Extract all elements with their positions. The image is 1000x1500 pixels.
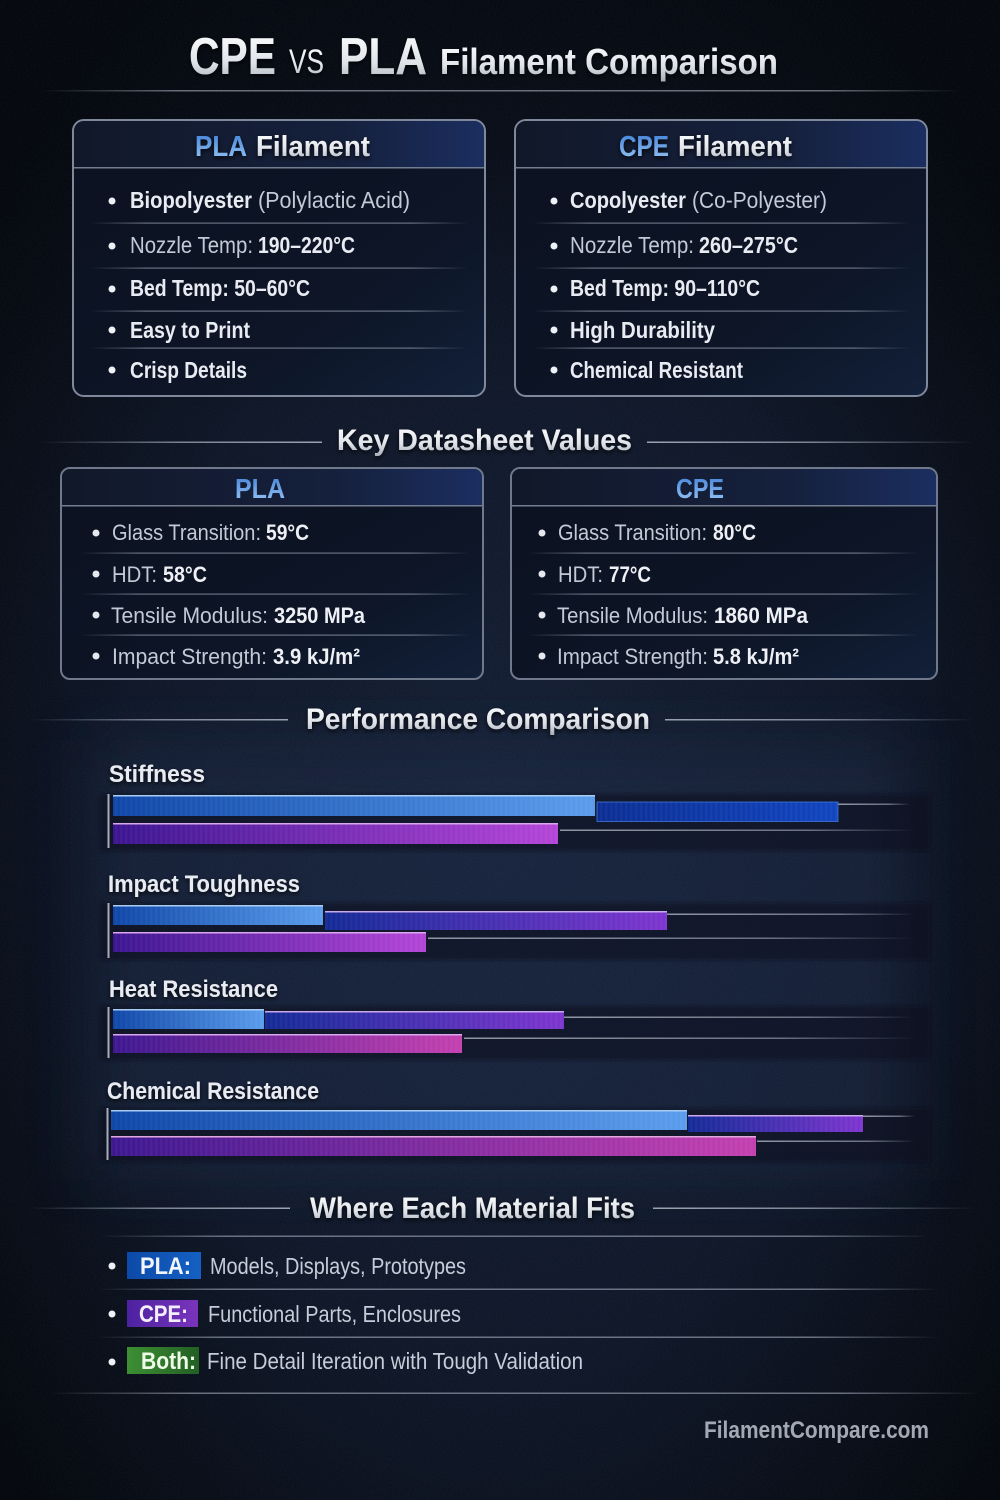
list: PLA properties: (Polylactic Acid) <box>258 187 410 213</box>
list: CPE properties <box>550 187 827 383</box>
tag: Both: Both: <box>141 1348 196 1375</box>
panel: CPE filament <box>515 120 927 396</box>
list: Both use <box>108 1347 583 1375</box>
list: CPE datasheet values: 80°C <box>713 520 756 545</box>
title <box>189 28 778 86</box>
heading: CPE Filament <box>619 131 792 163</box>
bar group: Chemical Resistance <box>106 1078 915 1160</box>
footer: site name: FilamentCompare.com <box>704 1417 929 1444</box>
list: PLA datasheet values: 58°C <box>163 562 207 587</box>
list: PLA properties: Crisp Details <box>130 357 247 383</box>
list: PLA use <box>108 1252 466 1280</box>
panel: PLA datasheet <box>61 468 483 679</box>
list: CPE properties: Nozzle Temp: <box>570 232 694 258</box>
list: CPE datasheet values: HDT: <box>558 562 603 587</box>
bar group: Heat Resistance: Heat Resistance <box>109 976 278 1003</box>
bar group: Chemical Resistance: Chemical Resistance <box>107 1078 319 1105</box>
bar group: Impact Toughness: Impact Toughness <box>108 871 300 898</box>
section heading: Where Each Material Fits: Where Each Material Fits <box>310 1192 635 1225</box>
bar group: Stiffness: Stiffness <box>109 761 205 788</box>
heading: PLA Filament: PLA <box>195 131 247 163</box>
list: CPE properties: Bed Temp: 90–110°C <box>570 275 760 301</box>
title: PLA <box>339 28 427 86</box>
heading: CPE Filament: Filament <box>678 131 792 163</box>
heading: PLA Filament <box>195 131 370 163</box>
list: PLA datasheet values: 3.9 kJ/m² <box>273 644 360 669</box>
list: PLA properties: 190–220°C <box>258 232 355 258</box>
bar group: Heat Resistance <box>108 976 915 1058</box>
list: PLA datasheet values: Tensile Modulus: <box>111 603 268 628</box>
list: CPE use: Functional Parts, Enclosures <box>208 1301 461 1327</box>
tag: CPE: CPE: <box>139 1301 188 1328</box>
list: PLA datasheet values: 59°C <box>266 520 309 545</box>
title: VS <box>289 43 324 81</box>
list: CPE datasheet values: 5.8 kJ/m² <box>713 644 799 669</box>
section heading: Performance Comparison: Performance Comparison <box>306 703 650 736</box>
list: CPE datasheet values: 77°C <box>609 562 651 587</box>
list: PLA properties <box>108 187 410 383</box>
list: PLA properties: Easy to Print <box>130 317 250 343</box>
title: CPE <box>189 28 276 86</box>
list: CPE datasheet values: Impact Strength: <box>557 644 708 669</box>
list: PLA datasheet values: Glass Transition: <box>112 520 261 545</box>
list: PLA properties: Bed Temp: 50–60°C <box>130 275 310 301</box>
section heading: Key Datasheet Values: Key Datasheet Values <box>337 424 632 457</box>
list: PLA datasheet values: Impact Strength: <box>112 644 267 669</box>
tag: PLA: PLA: <box>140 1253 191 1280</box>
list: CPE properties: Chemical Resistant <box>570 357 743 383</box>
heading: CPE Filament: CPE <box>619 131 669 163</box>
list: PLA datasheet values: 3250 MPa <box>274 603 366 628</box>
list: PLA use: Models, Displays, Prototypes <box>210 1253 466 1279</box>
list: PLA datasheet values: HDT: <box>112 562 157 587</box>
bar group: Impact Toughness <box>108 871 915 958</box>
list: CPE properties: High Durability <box>570 317 715 343</box>
list: PLA datasheet values <box>92 520 366 669</box>
list: CPE datasheet values: 1860 MPa <box>714 603 809 628</box>
list: CPE properties: Copolyester <box>570 187 686 213</box>
list: CPE properties: (Co-Polyester) <box>692 187 827 213</box>
title: Filament Comparison <box>440 41 778 82</box>
bar group: Stiffness <box>108 761 915 848</box>
list: CPE datasheet values: Tensile Modulus: <box>557 603 708 628</box>
list: PLA properties: Nozzle Temp: <box>130 232 253 258</box>
list: PLA properties: Biopolyester <box>130 187 252 213</box>
list: CPE use <box>108 1300 461 1328</box>
list: CPE datasheet values <box>538 520 809 669</box>
panel: PLA filament <box>73 120 485 396</box>
list: CPE properties: 260–275°C <box>699 232 798 258</box>
heading: CPE: CPE <box>676 473 724 504</box>
heading: PLA: PLA <box>235 473 285 504</box>
panel: CPE datasheet <box>511 468 937 679</box>
list: Both use: Fine Detail Iteration with Tough Validation <box>207 1348 583 1374</box>
bar chart: performance comparison <box>100 761 930 1162</box>
heading: PLA Filament: Filament <box>256 131 370 163</box>
list: CPE datasheet values: Glass Transition: <box>558 520 707 545</box>
